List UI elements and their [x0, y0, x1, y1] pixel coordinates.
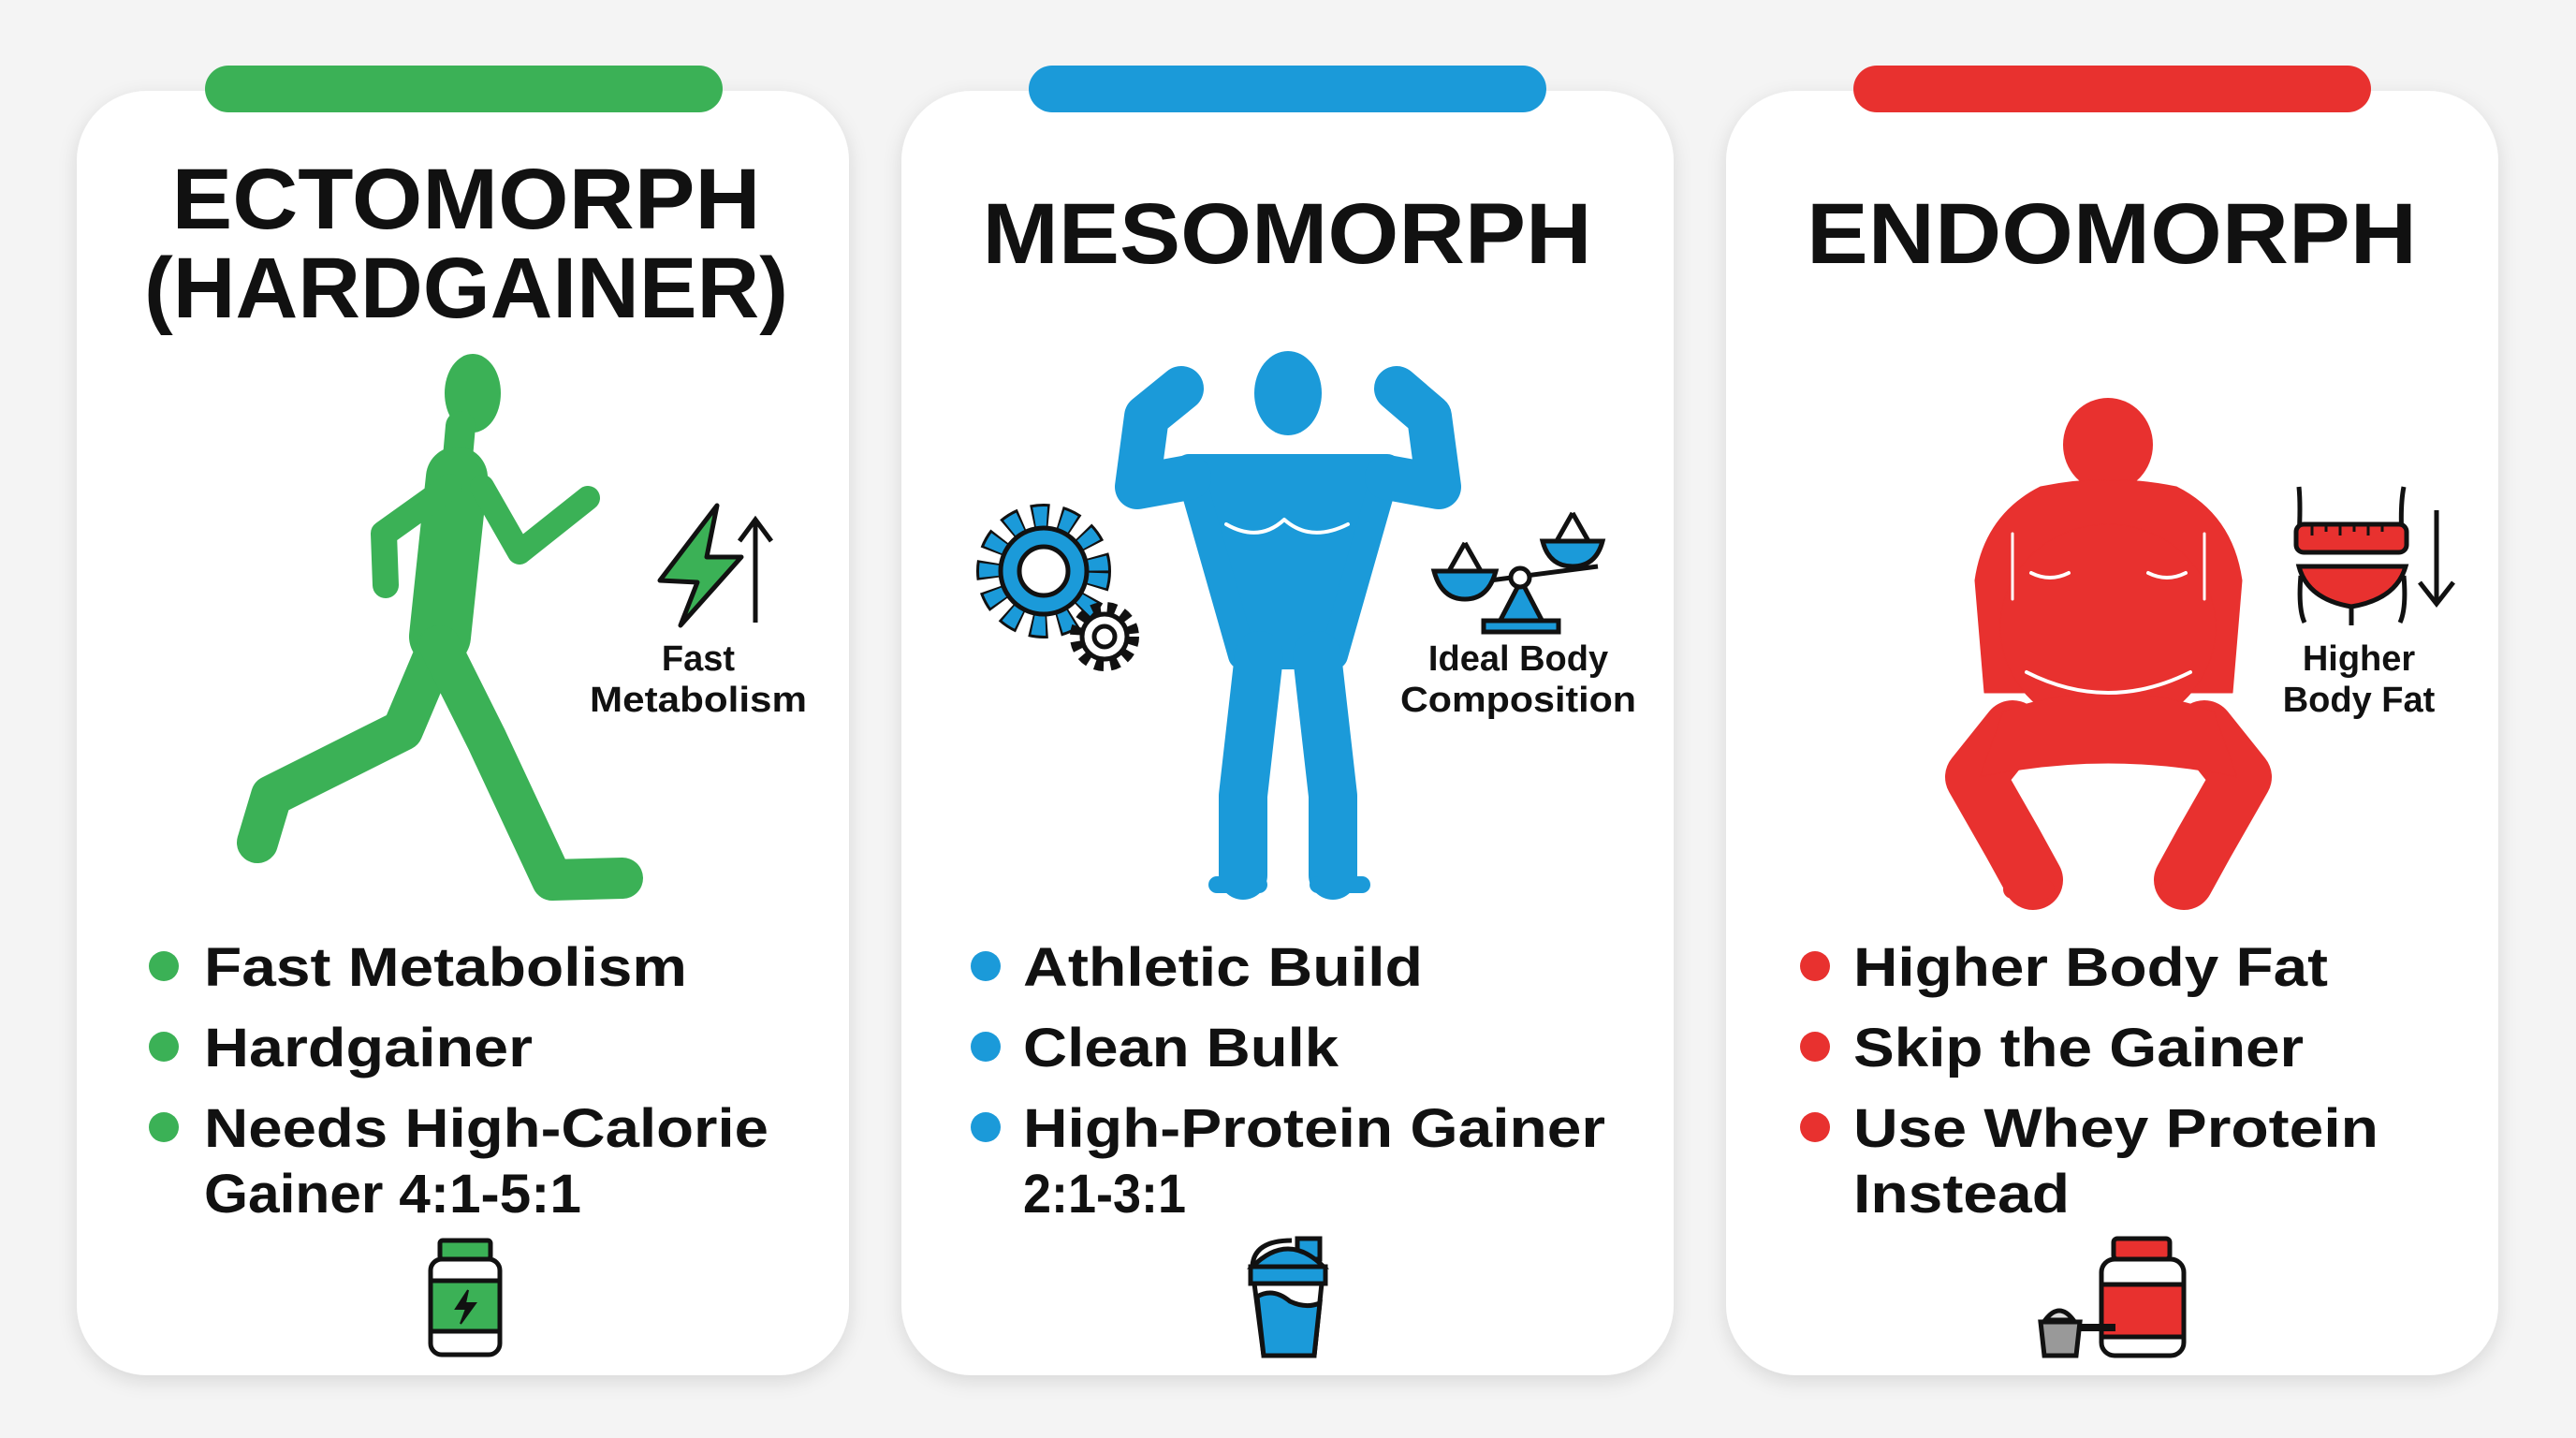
heading: endomorph: ENDOMORPH — [1807, 186, 2417, 282]
label: ideal body composition: Ideal Body — [1428, 639, 1608, 679]
panel: ectomorph — [77, 66, 849, 1375]
bullet list: ectomorph — [149, 937, 768, 1225]
label: higher body fat: Body Fat — [2283, 681, 2436, 720]
bullet list: mesomorph: High-Protein Gainer — [1023, 1098, 1605, 1159]
figure: flexing bodybuilder — [1137, 351, 1439, 885]
bullet list: endomorph: Skip the Gainer — [1853, 1018, 2304, 1078]
bullet list: ectomorph: Hardgainer — [204, 1018, 533, 1078]
panel: endomorph — [1726, 66, 2498, 1375]
icon: supplement jar — [431, 1240, 500, 1355]
figure: squatting endomorph — [1975, 398, 2242, 889]
heading: ectomorph: (HARDGAINER) — [144, 241, 788, 336]
bullet list: endomorph: Higher Body Fat — [1853, 937, 2328, 998]
bullet list: endomorph: Use Whey Protein — [1853, 1098, 2378, 1159]
icon: balance scale — [1434, 513, 1603, 632]
bullet list: endomorph — [1800, 937, 2378, 1225]
heading: ectomorph: ECTOMORPH — [172, 152, 760, 247]
heading: ectomorph — [144, 152, 788, 336]
bullet list: mesomorph — [971, 937, 1605, 1225]
bullet list: mesomorph: 2:1-3:1 — [1023, 1164, 1186, 1225]
icon: shaker bottle — [1251, 1239, 1325, 1356]
accent bar: green — [205, 66, 723, 112]
label: ideal body composition — [1400, 639, 1636, 720]
bullet list: mesomorph: Athletic Build — [1023, 937, 1423, 998]
label: ideal body composition: Composition — [1400, 681, 1636, 720]
bullet list: ectomorph: Gainer 4:1-5:1 — [204, 1164, 581, 1225]
bullet list: endomorph: Instead — [1853, 1164, 2070, 1225]
icon: gears — [991, 519, 1133, 665]
panel: mesomorph — [901, 66, 1674, 1375]
label: higher body fat — [2283, 639, 2436, 720]
bullet list: ectomorph: Needs High-Calorie — [204, 1098, 768, 1159]
accent bar: red — [1853, 66, 2371, 112]
bullet list: ectomorph: Fast Metabolism — [204, 937, 687, 998]
icon: lightning bolt with up arrow — [660, 506, 771, 625]
heading: mesomorph: MESOMORPH — [983, 186, 1591, 282]
accent bar: blue — [1029, 66, 1546, 112]
label: higher body fat: Higher — [2303, 639, 2415, 679]
icon: protein tub with scoop — [2041, 1239, 2184, 1356]
label: fast metabolism — [590, 639, 807, 720]
label: fast metabolism: Fast — [662, 639, 735, 679]
figure: runner — [257, 354, 622, 880]
label: fast metabolism: Metabolism — [590, 681, 807, 720]
icon: measuring tape waist with down arrow — [2296, 487, 2453, 625]
bullet list: mesomorph: Clean Bulk — [1023, 1018, 1339, 1078]
